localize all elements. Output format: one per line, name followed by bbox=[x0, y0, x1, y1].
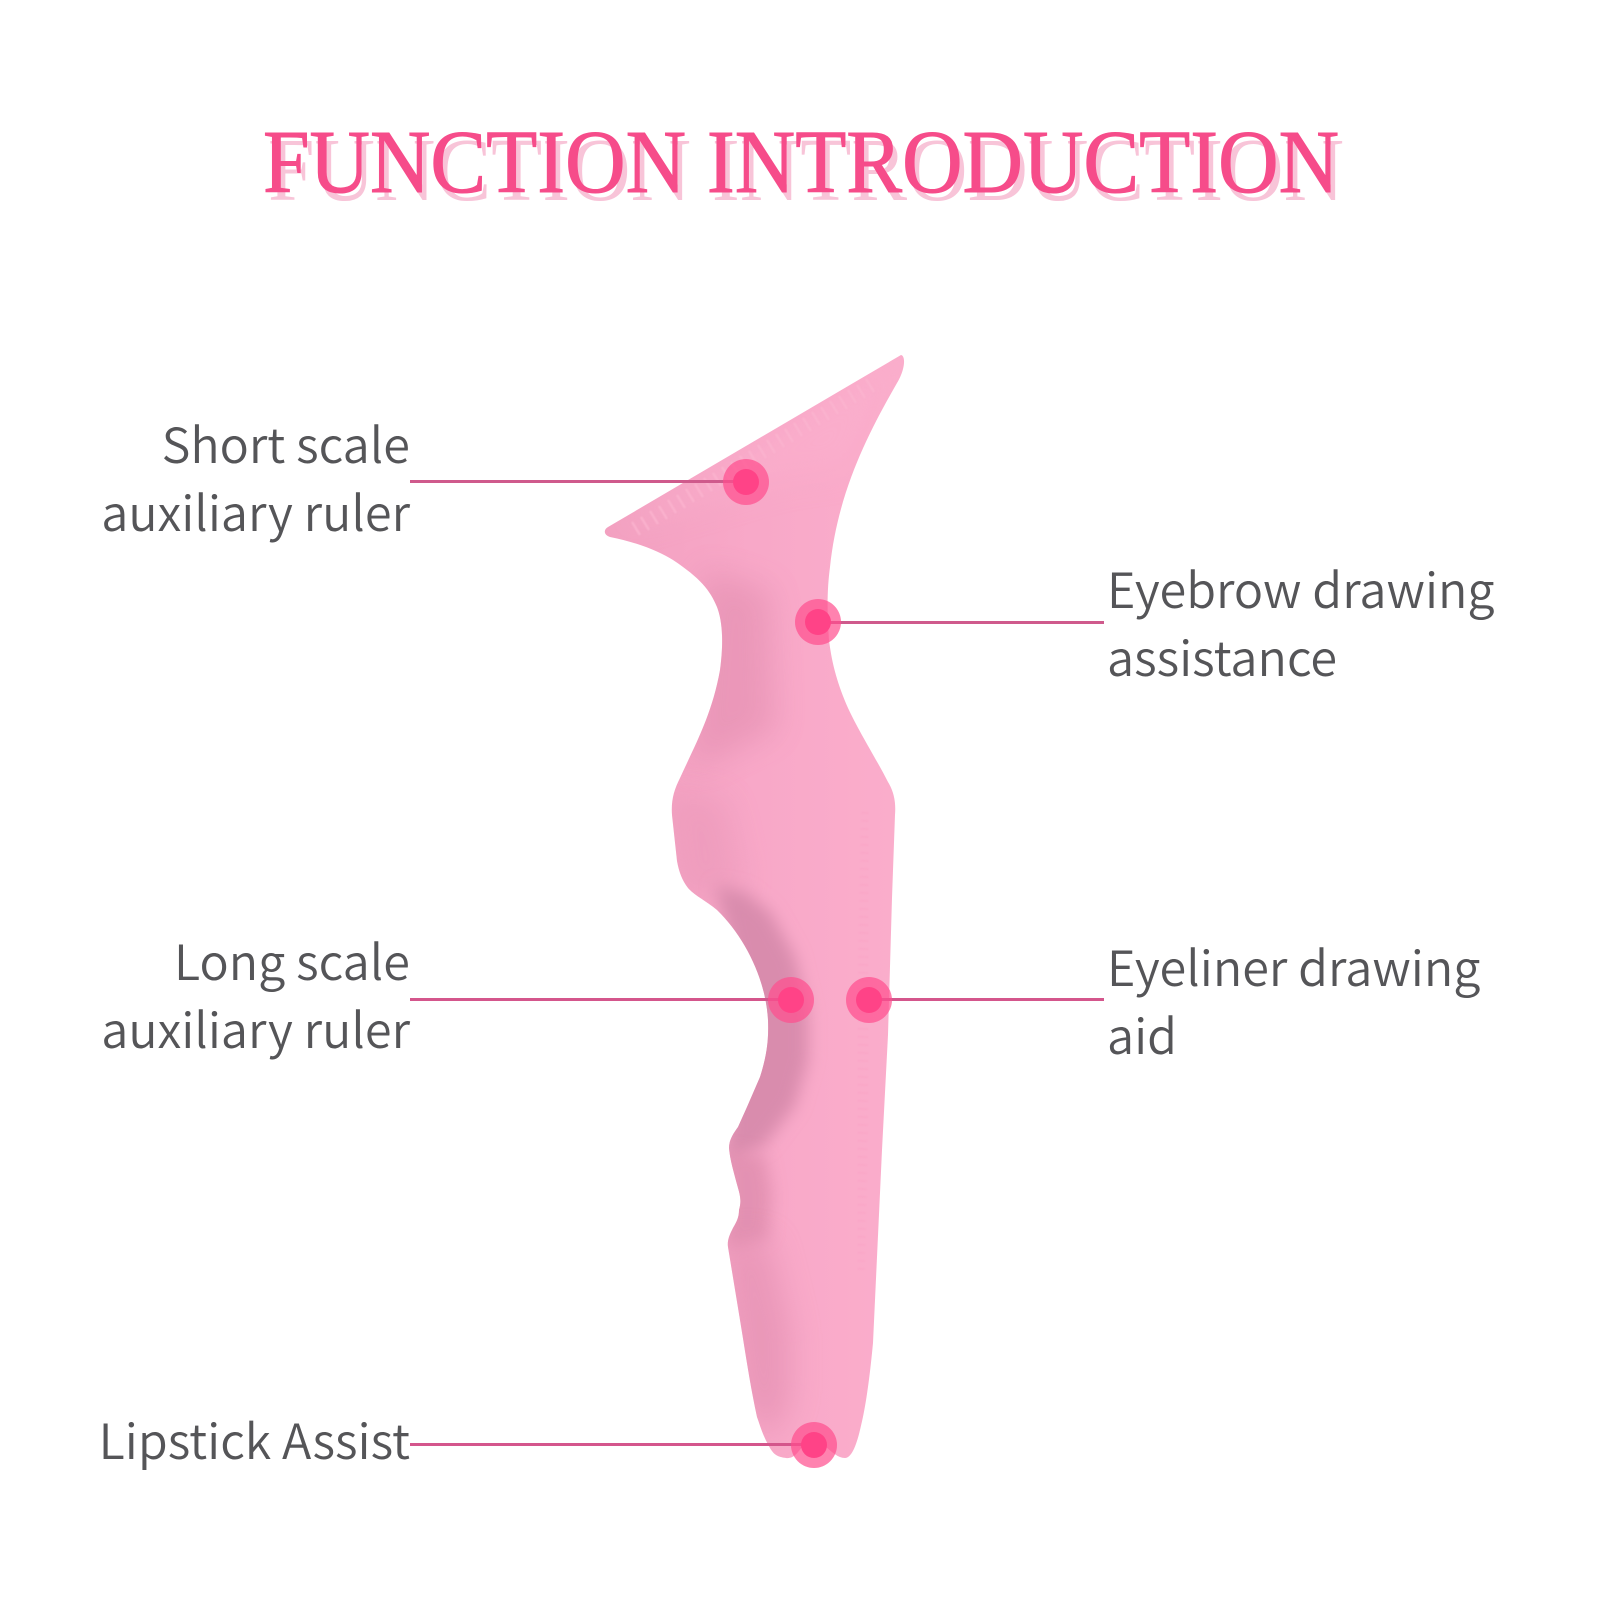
infographic canvas bbox=[104, 132, 1494, 1470]
marker bbox=[846, 977, 892, 1023]
product: pink silicone makeup guide tool bbox=[604, 355, 904, 1458]
lower grip shade bbox=[725, 1150, 772, 1250]
label text: Eyeliner drawing bbox=[1107, 930, 1480, 1000]
label text: Eyebrow drawing bbox=[1107, 552, 1495, 622]
handle shade bbox=[728, 1246, 792, 1426]
leader line bbox=[818, 621, 1104, 624]
neck shade bbox=[693, 578, 774, 756]
title: FUNCTION INTRODUCTION bbox=[263, 113, 1339, 212]
label text: Long scale bbox=[174, 924, 410, 994]
marker bbox=[791, 1422, 837, 1468]
leader line bbox=[410, 1443, 814, 1446]
callout: eyebrow drawing assistance bbox=[795, 552, 1495, 690]
leader line bbox=[410, 480, 746, 483]
curved thumb band shade bbox=[715, 885, 808, 1165]
label text: Lipstick Assist bbox=[99, 1403, 410, 1473]
label text: auxiliary ruler bbox=[101, 475, 411, 545]
grip left shade bbox=[693, 821, 720, 870]
callout: long scale auxiliary ruler bbox=[101, 924, 814, 1062]
marker bbox=[795, 599, 841, 645]
callout: short scale auxiliary ruler bbox=[101, 407, 769, 545]
marker bbox=[723, 459, 769, 505]
short ruler tick marks bbox=[632, 458, 741, 535]
title: FUNCTION INTRODUCTION bbox=[268, 121, 1344, 220]
marker bbox=[768, 977, 814, 1023]
leader line bbox=[410, 998, 791, 1001]
leader line bbox=[869, 998, 1104, 1001]
label text: aid bbox=[1107, 998, 1177, 1068]
label text: Short scale bbox=[162, 407, 410, 477]
callout: lipstick assist bbox=[99, 1403, 837, 1473]
callout: eyeliner drawing aid bbox=[846, 930, 1480, 1068]
light top wedge bbox=[610, 355, 900, 530]
label text: auxiliary ruler bbox=[101, 992, 411, 1062]
label text: assistance bbox=[1107, 620, 1337, 690]
long ruler faint scale on the tool bbox=[858, 812, 868, 1270]
